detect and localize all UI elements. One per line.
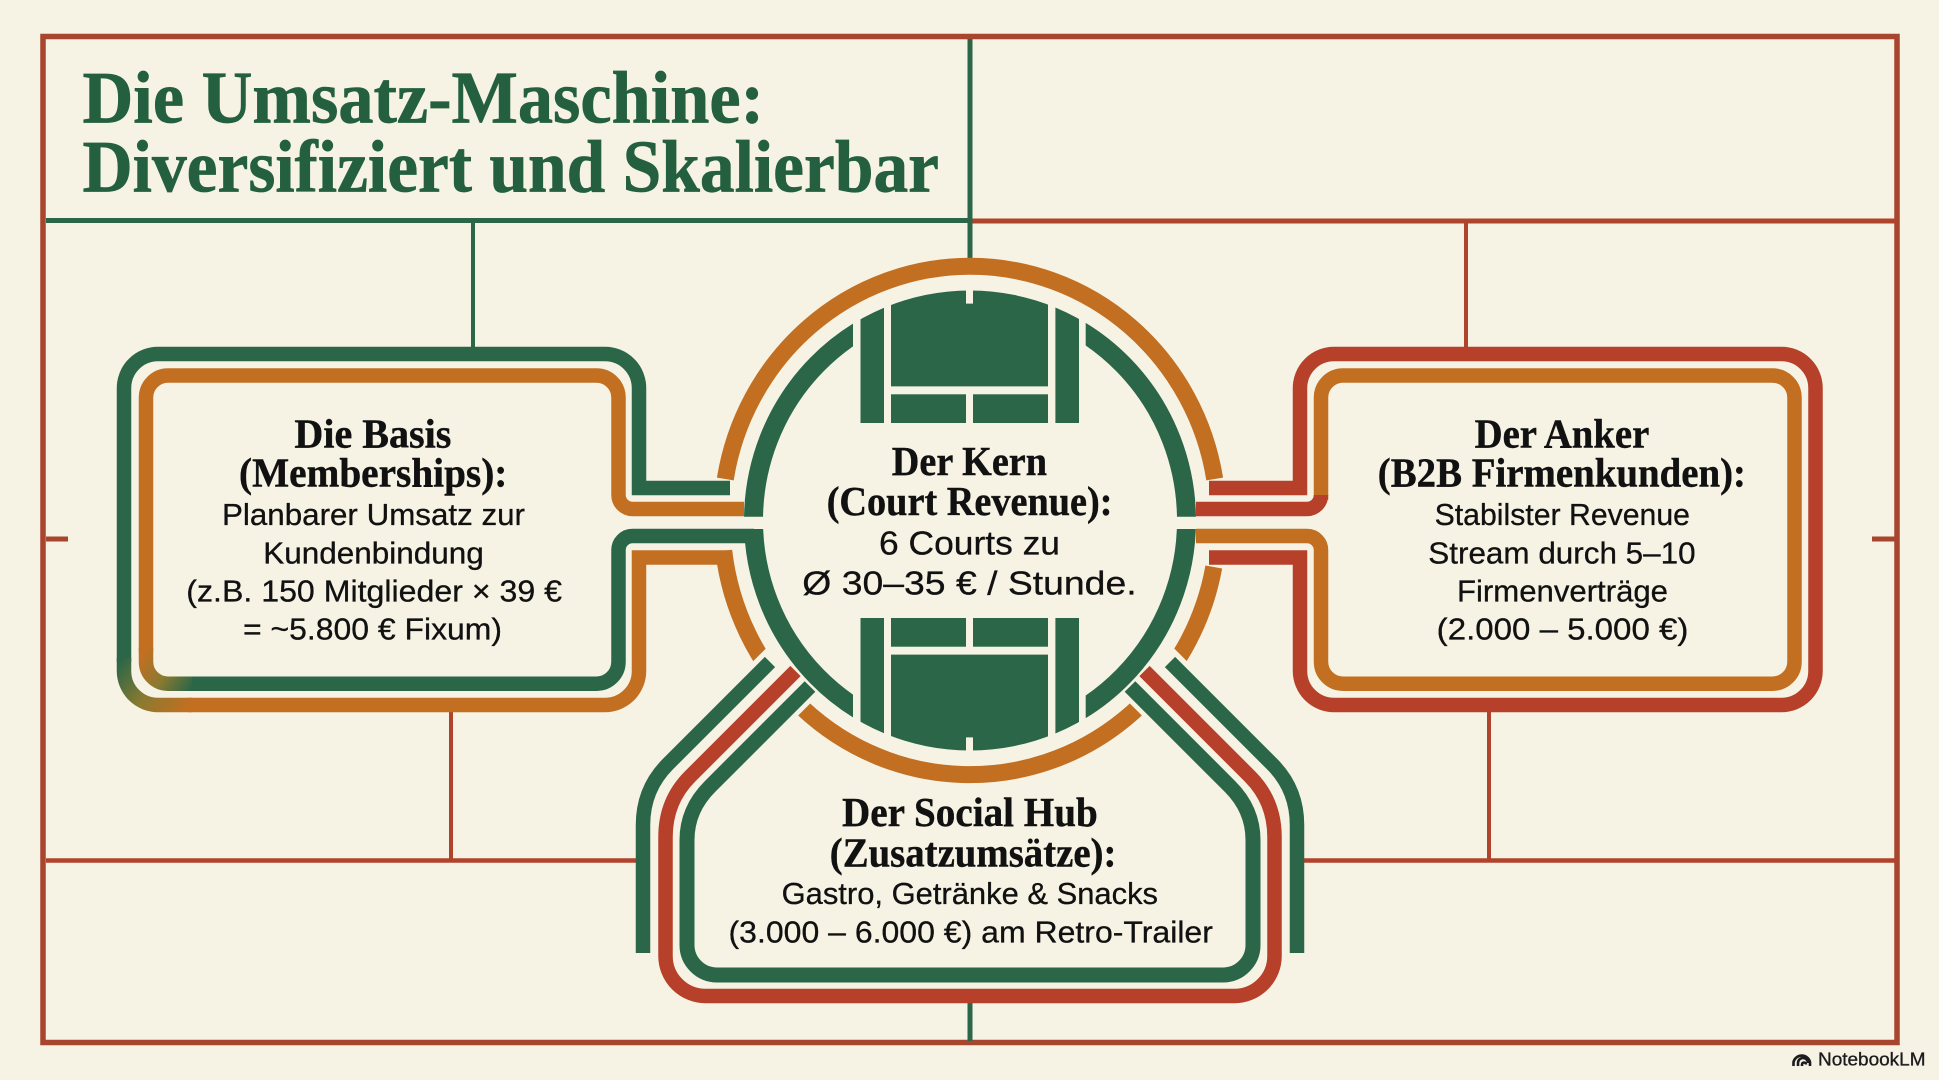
text: der anker: (B2B Firmenkunden):: [1378, 450, 1746, 496]
text: der social hub: [728, 789, 1213, 950]
outer red track: [1209, 354, 1816, 705]
inner green track: [687, 686, 1253, 975]
inner orange track: [1196, 376, 1794, 684]
outer green rails: [643, 662, 770, 953]
text: die basis: Kundenbindung: [263, 535, 484, 570]
diagonal separators of social hub: [668, 660, 1272, 786]
text: die basis: (z.B. 150 Mitglieder × 39 €: [186, 574, 562, 609]
text: der anker: (2.000 – 5.000 €): [1437, 611, 1688, 646]
panel: core circle inner green ring: [754, 300, 1186, 741]
panel: der anker: [1196, 354, 1816, 705]
text: der kern: [802, 438, 1137, 602]
text: der anker: [1378, 410, 1746, 646]
text: der kern: 6 Courts zu: [879, 524, 1060, 561]
text: der kern: Der Kern: [892, 438, 1047, 484]
text: der social hub: (3.000 – 6.000 €) am Retro-Trailer: [728, 915, 1213, 950]
text: die basis: Die Basis: [294, 410, 451, 456]
text: der social hub: Der Social Hub: [842, 789, 1098, 835]
text: der social hub: (Zusatzumsätze):: [830, 830, 1116, 876]
red track: [666, 671, 1274, 996]
text: die basis: Planbarer Umsatz zur: [222, 497, 525, 532]
title: Diversifiziert und Skalierbar: [82, 127, 939, 209]
text: die basis: (Memberships):: [239, 450, 507, 496]
text: der kern: Ø 30–35 € / Stunde.: [802, 565, 1137, 602]
text: der social hub: Gastro, Getränke & Snacks: [782, 876, 1158, 911]
text: der anker: Der Anker: [1475, 410, 1649, 456]
panel: der social hub: [643, 662, 1297, 996]
text: die basis: = ~5.800 € Fixum): [243, 611, 502, 646]
panel: core circle outer orange ring: [724, 266, 1215, 775]
icon: tennis court top: [860, 280, 1079, 423]
text: der kern: (Court Revenue):: [827, 478, 1112, 524]
text: der anker: Firmenverträge: [1457, 574, 1668, 609]
title: [82, 58, 939, 209]
NotebookLM logo: NotebookLM: [1818, 1049, 1926, 1070]
text: die basis: [186, 410, 562, 646]
text: der anker: Stream durch 5–10: [1428, 535, 1696, 570]
title: Die Umsatz-Maschine:: [82, 58, 764, 140]
outer track top: [124, 354, 730, 662]
inner track: [146, 376, 744, 652]
text: der anker: Stabilster Revenue: [1435, 497, 1690, 532]
icon: tennis court bottom: [860, 618, 1079, 761]
icon: notebooklm arcs: [1794, 1056, 1810, 1066]
panel: die basis: [124, 354, 754, 705]
